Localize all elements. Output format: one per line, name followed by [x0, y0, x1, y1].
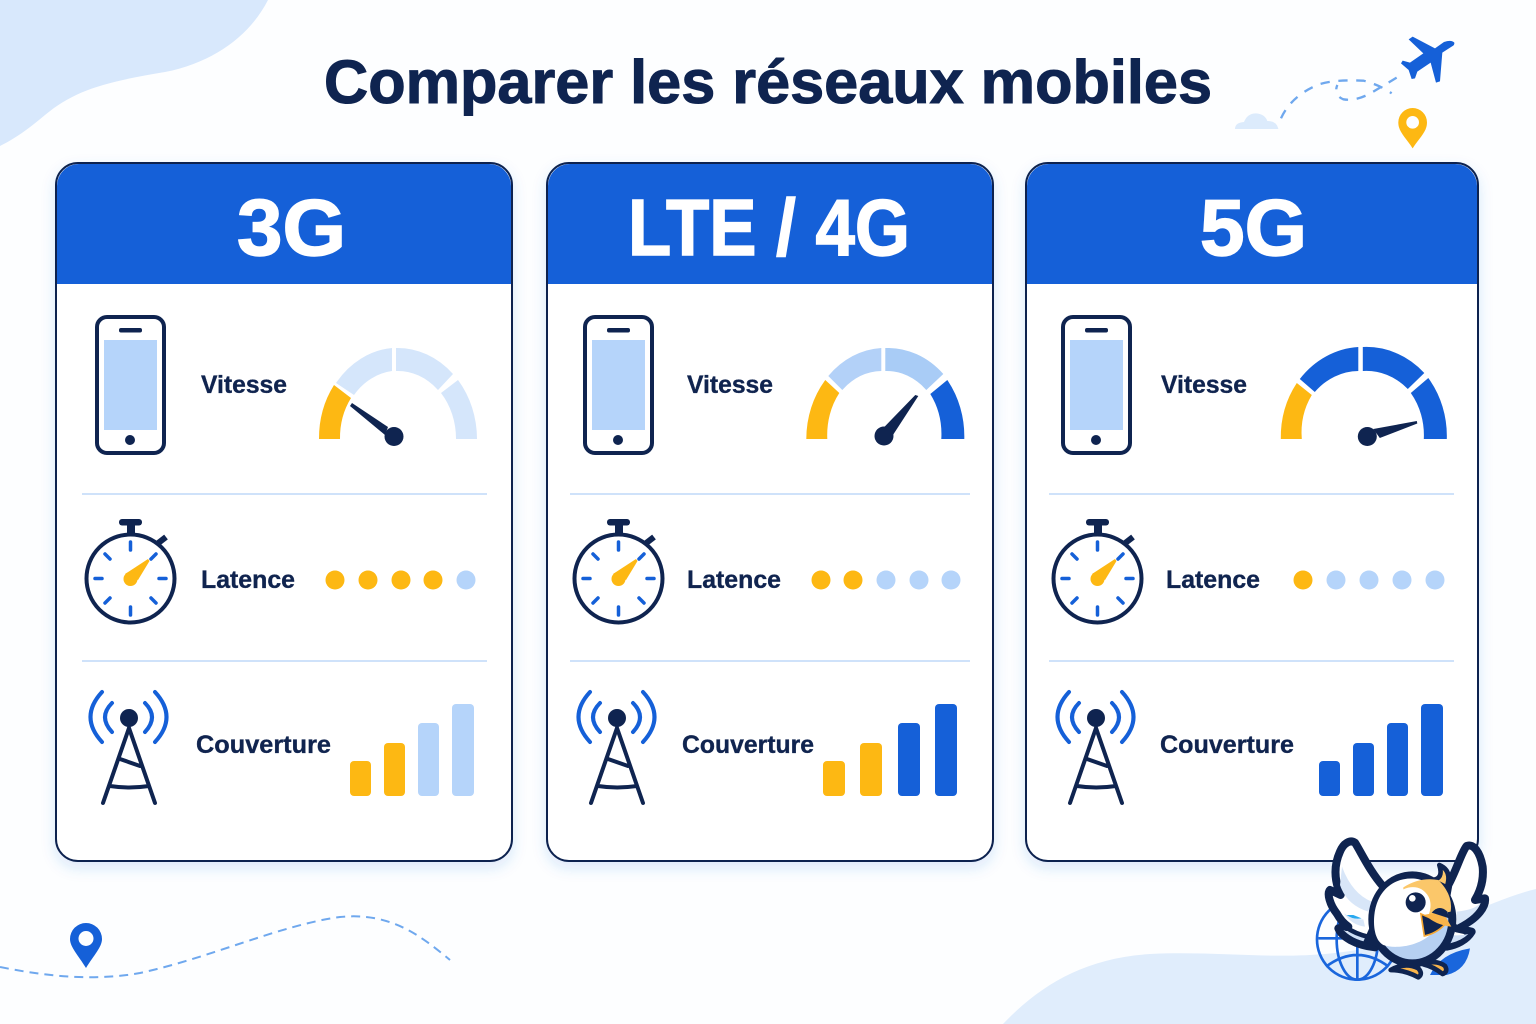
head patch [1403, 879, 1451, 916]
card header band [548, 164, 992, 284]
label: Latence: Latence [201, 566, 295, 594]
panel: 5G [1026, 163, 1478, 861]
eye [1406, 892, 1426, 912]
icon: globe [1317, 899, 1398, 980]
divider [82, 660, 487, 662]
panel: LTE / 4G [547, 163, 993, 861]
heading: 3G: 3G [237, 183, 346, 272]
icon: cloud [1235, 113, 1278, 129]
rating dots: latency [1294, 570, 1444, 590]
feet [1391, 962, 1446, 977]
icon: stopwatch [1054, 519, 1142, 622]
card background [1026, 163, 1478, 861]
title: Comparer les réseaux mobiles [324, 48, 1212, 116]
icon: blue location pin [70, 923, 102, 968]
label: Latence: Latence [1166, 566, 1260, 594]
divider [1049, 660, 1454, 662]
icon: yellow location pin [1398, 108, 1427, 148]
right wing [1443, 846, 1485, 947]
gauge: speed high [1281, 347, 1447, 446]
label: Vitesse: Vitesse [687, 371, 773, 399]
beak [1421, 908, 1451, 936]
icon: phone [97, 317, 164, 453]
divider [82, 493, 487, 495]
label: Vitesse: Vitesse [1161, 371, 1247, 399]
bar chart: coverage [350, 704, 474, 796]
label: Latence: Latence [687, 566, 781, 594]
left wing [1329, 841, 1387, 947]
belly [1374, 878, 1442, 947]
card background [56, 163, 512, 861]
panel: 3G [56, 163, 512, 861]
background blob: bottom right [1003, 889, 1536, 1024]
rating dots: latency [812, 570, 960, 590]
gauge: speed medium [806, 348, 964, 446]
icon: phone [1063, 317, 1130, 453]
heading: LTE / 4G: LTE / 4G [628, 183, 910, 272]
dashed flight route [1281, 78, 1397, 118]
bar chart: coverage [1319, 704, 1443, 796]
icon: phone [585, 317, 652, 453]
head crest [1432, 865, 1449, 887]
decoration: dashed route bottom left [0, 916, 450, 977]
gauge: speed low [319, 348, 477, 446]
icon: antenna tower [90, 692, 166, 803]
label: Couverture: Couverture [196, 731, 331, 759]
label: Vitesse: Vitesse [201, 371, 287, 399]
icon: stopwatch [574, 519, 662, 622]
divider [570, 660, 970, 662]
mascot: bird with globe [1317, 841, 1485, 980]
icon: leaf [1430, 948, 1470, 975]
divider [1049, 493, 1454, 495]
decoration: plane, route, cloud and pin [1235, 37, 1454, 148]
icon: plane [1401, 37, 1454, 83]
card header band [57, 164, 511, 284]
bar chart: coverage [823, 704, 957, 796]
background blob: top left [0, 0, 268, 146]
label: Couverture: Couverture [682, 731, 814, 759]
icon: antenna tower [578, 692, 654, 803]
rating dots: latency [326, 570, 476, 590]
divider [570, 493, 970, 495]
navy wing notch [1363, 927, 1377, 947]
icon: stopwatch [86, 519, 174, 622]
card background [547, 163, 993, 861]
heading: 5G: 5G [1200, 183, 1307, 272]
card header band [1027, 164, 1477, 284]
label: Couverture: Couverture [1160, 731, 1294, 759]
icon: antenna tower [1058, 692, 1134, 803]
body [1372, 875, 1452, 963]
